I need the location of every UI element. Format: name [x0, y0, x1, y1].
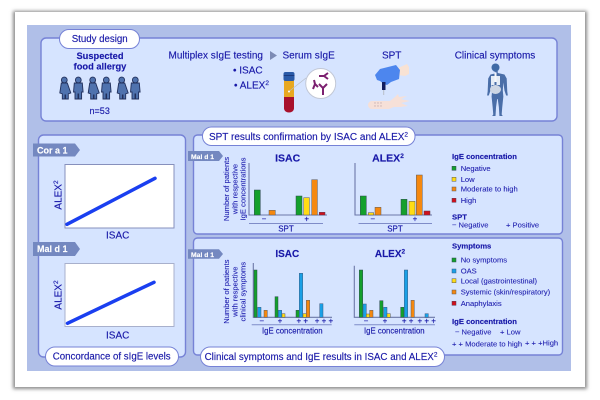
chart: Mal d 1 concordance: [53, 264, 174, 342]
legend: IgE concentration: Moderate to high: [461, 185, 518, 194]
chart: symptoms ISAC: −: [259, 316, 264, 326]
y axis label: Number of patients: [222, 157, 231, 221]
tag: Mal d 1: Mal d 1: [37, 244, 68, 254]
legend: IgE concentration key: [452, 317, 558, 349]
chart: Cor a 1 concordance: [53, 164, 174, 241]
icon: human body: [487, 64, 508, 116]
panel: study design: [41, 30, 557, 121]
chart: Cor a 1 concordance: 2: [53, 180, 60, 184]
chart: symptoms ISAC: [252, 249, 334, 336]
legend: IgE concentration: High: [461, 196, 476, 205]
legend: IgE concentration: Negative: [461, 164, 491, 173]
legend: IgE concentration key: − Negative: [455, 328, 492, 337]
chart: SPT ISAC: −: [262, 214, 267, 224]
tag: Cor a 1: Cor a 1: [37, 145, 68, 155]
tag: Cor a 1: [33, 144, 80, 156]
text: multiplex testing: Multiplex sIgE testing: [168, 51, 263, 62]
panel: SPT results: [188, 127, 562, 234]
text: sample size: n=53: [90, 106, 110, 116]
icon: group of patients: [60, 77, 140, 99]
chart: Cor a 1 concordance: ISAC: [106, 230, 129, 241]
icon: blood tube: [284, 72, 306, 112]
chart: SPT ALEX2: SPT: [387, 225, 403, 234]
text: ALEX bullet: • ALEX: [234, 81, 265, 92]
tag: Mal d 1: Mal d 1: [191, 252, 214, 259]
text: SPT heading: SPT: [382, 51, 401, 62]
chart: SPT ALEX2: [355, 152, 432, 234]
y axis label: IgE concentrations: [239, 157, 248, 220]
heading: concordance: [46, 347, 178, 366]
text: clinical symptoms heading: Clinical symptoms: [455, 51, 535, 62]
chart: symptoms ISAC: IgE concentration: [262, 326, 323, 336]
chart: symptoms ALEX2: + +: [402, 316, 414, 326]
chart: symptoms ALEX2: +: [383, 316, 388, 326]
chart: symptoms ISAC: + + +: [315, 316, 334, 326]
legend: symptoms: No symptoms: [461, 256, 507, 265]
chart: SPT ISAC: ISAC: [275, 152, 301, 164]
tag: Mal d 1: [188, 249, 223, 259]
legend: IgE concentration: [452, 152, 539, 229]
legend: symptoms: Anaphylaxis: [461, 299, 502, 308]
chart: SPT ISAC: +: [304, 214, 309, 224]
legend: IgE concentration key: IgE concentration: [452, 317, 517, 326]
legend: IgE concentration: − Negative: [452, 220, 489, 229]
chart: SPT ALEX2: +: [413, 214, 418, 224]
y axis label: with respective: [230, 164, 239, 215]
legend: symptoms: [452, 242, 551, 308]
heading: study design: Study design: [72, 34, 128, 45]
chart: symptoms ISAC: ISAC: [275, 249, 299, 260]
heading: clinical symptoms: [200, 347, 444, 366]
heading: study design: [60, 30, 140, 48]
tag: Mal d 1: Mal d 1: [191, 154, 214, 161]
text: suspected food allergy: food allergy: [74, 62, 127, 72]
arrow: testing to serum: [270, 51, 277, 60]
legend: IgE concentration key: + Low: [500, 328, 521, 337]
heading: clinical symptoms: Clinical symptoms and IgE results in ISAC and ALEX: [205, 352, 434, 363]
panel: concordance of sIgE levels: [33, 135, 186, 366]
y axis label: with respective: [230, 267, 239, 318]
legend: symptoms: OAS: [461, 267, 477, 276]
chart: symptoms ALEX2: IgE concentration: [364, 326, 425, 336]
legend: IgE concentration: IgE concentration: [452, 152, 517, 161]
y axis label: Number of patients: [222, 259, 231, 324]
chart: symptoms ALEX2: + + +: [417, 316, 436, 326]
chart: SPT ALEX2: ALEX: [372, 152, 400, 164]
tag: Mal d 1: [188, 151, 223, 161]
heading: SPT results: 2: [404, 132, 408, 139]
chart: symptoms ISAC: +: [278, 316, 283, 326]
icon: antibodies magnifier: [306, 68, 336, 98]
heading: concordance: Concordance of sIgE levels: [53, 352, 171, 363]
chart: Mal d 1 concordance: ALEX: [54, 284, 64, 310]
legend: IgE concentration key: + + +High: [525, 339, 558, 348]
text: serum sIgE: Serum sIgE: [282, 51, 335, 62]
panel: clinical symptoms: [188, 238, 562, 366]
heading: SPT results: SPT results confirmation by ISAC and ALEX: [209, 132, 404, 143]
chart: SPT ALEX2: −: [370, 214, 375, 224]
chart: SPT ISAC: SPT: [278, 225, 294, 234]
y axis label: clinical symptoms: [239, 262, 248, 321]
chart: Mal d 1 concordance: ISAC: [106, 331, 129, 342]
chart: symptoms ALEX2: [354, 248, 436, 336]
text: ISAC bullet: • ISAC: [233, 66, 263, 77]
chart: symptoms ISAC: + +: [297, 316, 308, 326]
heading: clinical symptoms: 2: [434, 352, 438, 359]
legend: IgE concentration key: + + Moderate to high: [452, 340, 522, 349]
chart: symptoms ALEX2: −: [364, 316, 369, 326]
legend: symptoms: Systemic (skin/respiratory): [461, 288, 551, 297]
tag: Mal d 1: [33, 242, 80, 256]
legend: IgE concentration: + Positive: [506, 220, 539, 229]
chart: symptoms ALEX2: ALEX: [375, 249, 402, 260]
chart: Mal d 1 concordance: 2: [53, 280, 60, 284]
chart: Cor a 1 concordance: ALEX: [54, 184, 64, 210]
chart: SPT ALEX2: 2: [400, 153, 404, 160]
chart: symptoms ALEX2: 2: [402, 248, 406, 256]
heading: SPT results: [202, 127, 415, 146]
legend: symptoms: Symptoms: [452, 242, 491, 251]
text: suspected food allergy: Suspected: [76, 51, 124, 61]
legend: symptoms: Local (gastrointestinal): [461, 276, 538, 285]
text: ALEX bullet: 2: [265, 80, 269, 87]
icon: skin prick test hand: [368, 64, 410, 109]
chart: SPT ISAC: [249, 152, 327, 234]
legend: IgE concentration: SPT: [452, 212, 467, 222]
legend: IgE concentration: Low: [461, 175, 475, 184]
